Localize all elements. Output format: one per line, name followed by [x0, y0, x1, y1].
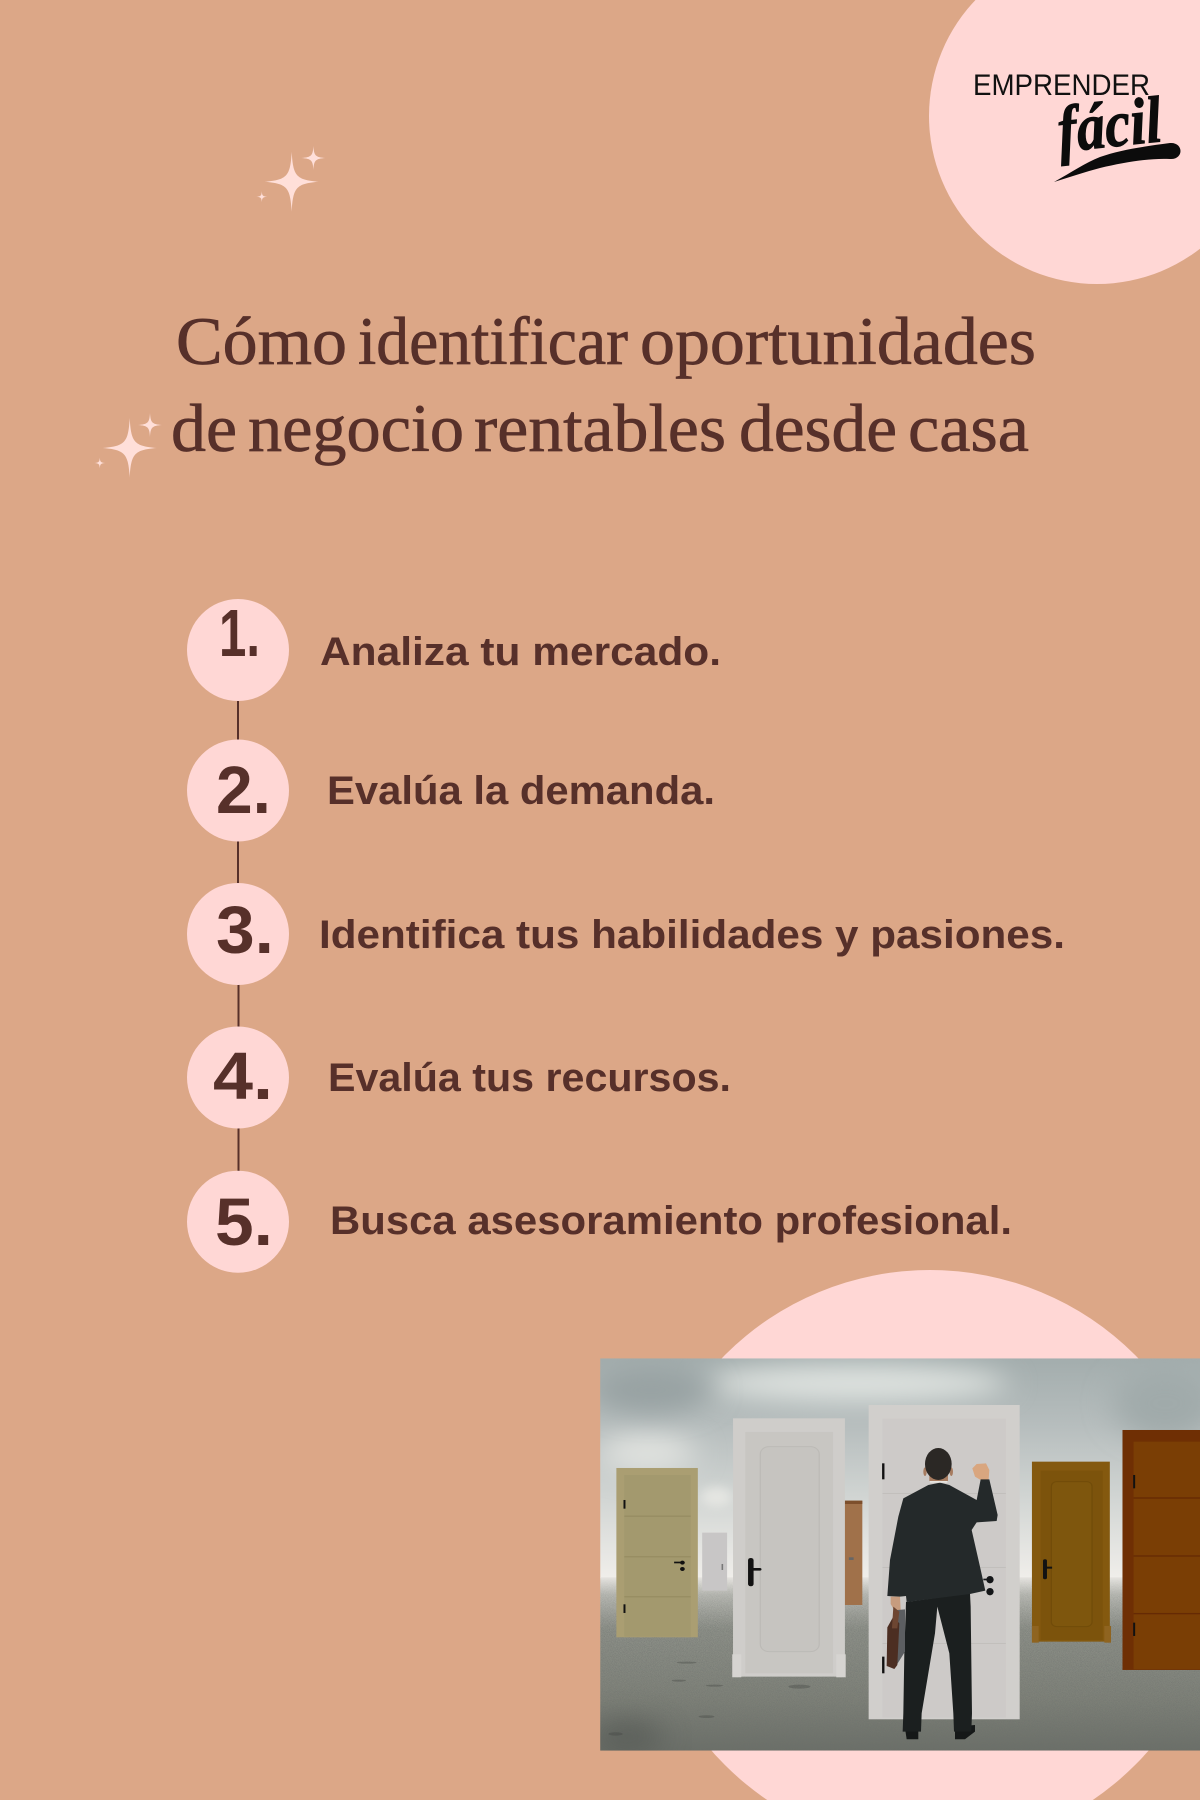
ground	[592, 1577, 1200, 1757]
briefcase	[887, 1607, 905, 1669]
sparkles top	[256, 146, 325, 212]
photo backing circle	[640, 1270, 1200, 1800]
trousers	[903, 1593, 972, 1732]
logo word: EMPRENDER: EMPRENDER	[973, 69, 1150, 102]
title line 2: de	[171, 390, 237, 466]
title line 2: rentables	[474, 390, 726, 466]
ears and neck	[923, 1467, 953, 1481]
logo swash	[1054, 143, 1180, 182]
door: rust	[1122, 1430, 1200, 1670]
door: small grey	[702, 1533, 727, 1591]
jacket	[887, 1479, 998, 1602]
head	[925, 1448, 952, 1480]
sparkles beside title	[94, 413, 162, 478]
step 3	[187, 883, 1065, 985]
door: white centre	[869, 1405, 1020, 1719]
step 2	[187, 740, 715, 842]
logo badge circle	[929, 0, 1200, 284]
title line 1: oportunidades	[640, 303, 1036, 379]
step 1	[187, 596, 721, 701]
photo: businessman knocking among doors	[592, 1358, 1200, 1757]
step 5: Busca asesoramiento profesional.	[330, 1199, 1012, 1243]
step 3: Identifica tus habilidades y pasiones.	[319, 913, 1065, 957]
step 3: 3.	[216, 893, 274, 968]
door: distant brown	[844, 1501, 862, 1605]
door: olive	[616, 1468, 698, 1637]
title line 2: desde	[739, 390, 897, 466]
steps list	[187, 596, 1065, 1273]
door: amber	[1032, 1462, 1111, 1643]
title	[171, 303, 1036, 466]
step 2: Evalúa la demanda.	[327, 769, 715, 813]
step 1: Analiza tu mercado.	[320, 630, 721, 674]
title line 2: casa	[908, 390, 1029, 466]
lower hand	[891, 1597, 901, 1612]
connector lines	[237, 698, 240, 1173]
man in suit	[887, 1448, 998, 1739]
collar	[930, 1480, 947, 1483]
sky	[592, 1358, 1200, 1578]
logo: Emprender fácil	[973, 69, 1180, 182]
photo scene	[592, 1358, 1200, 1757]
title line 1: identificar	[358, 303, 628, 379]
door knobs	[983, 1576, 994, 1595]
step 2: 2.	[216, 753, 271, 828]
title line 2: negocio	[248, 390, 464, 466]
door: white left	[732, 1418, 846, 1677]
step 5	[187, 1171, 1012, 1273]
step 5: 5.	[215, 1185, 273, 1260]
title line 1: Cómo	[176, 303, 347, 379]
raised fist	[972, 1463, 989, 1480]
step 1: 1.	[219, 596, 260, 671]
shoes	[905, 1725, 975, 1739]
title line 2	[171, 390, 1029, 466]
step 4: Evalúa tus recursos.	[328, 1056, 731, 1100]
title line 1	[176, 303, 1036, 379]
logo word: fácil: fácil	[1054, 83, 1166, 167]
step 4	[187, 1026, 731, 1128]
step 4: 4.	[213, 1039, 273, 1114]
